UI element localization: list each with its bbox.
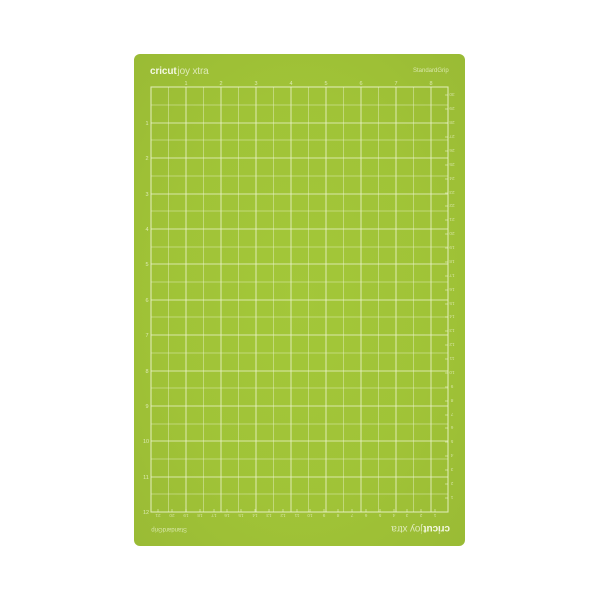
right centimetre ruler: 27 xyxy=(449,133,455,139)
right centimetre ruler: 10 xyxy=(449,369,455,375)
bottom centimetre ruler: 18 xyxy=(197,512,203,518)
top inch ruler: 6 xyxy=(359,81,363,87)
right centimetre ruler: 25 xyxy=(449,161,455,167)
right centimetre ruler: 26 xyxy=(449,147,455,153)
bottom centimetre ruler: 5 xyxy=(378,512,381,518)
right centimetre ruler: 9 xyxy=(450,383,453,389)
left inch ruler: 10 xyxy=(143,439,149,445)
logo: top xyxy=(150,66,209,77)
left inch ruler: 9 xyxy=(145,404,149,410)
left inch ruler: 5 xyxy=(145,262,149,268)
bottom centimetre ruler: 10 xyxy=(307,512,313,518)
right centimetre ruler: 16 xyxy=(449,286,455,292)
right centimetre ruler: 30 xyxy=(449,91,455,97)
bottom centimetre ruler: 2 xyxy=(419,512,422,518)
right centimetre ruler: 11 xyxy=(449,355,454,361)
right centimetre ruler: 2 xyxy=(450,480,453,486)
left inch ruler: 11 xyxy=(143,475,149,481)
right centimetre ruler: 19 xyxy=(449,244,455,250)
bottom centimetre ruler: 16 xyxy=(224,512,230,518)
bottom centimetre ruler: 14 xyxy=(252,512,258,518)
right centimetre ruler: 29 xyxy=(449,105,455,111)
right centimetre ruler: 3 xyxy=(450,466,453,472)
right centimetre ruler: 22 xyxy=(449,202,455,208)
panel: cutting mat xyxy=(134,54,465,546)
top inch ruler: 7 xyxy=(394,81,398,87)
right centimetre ruler: 15 xyxy=(449,300,455,306)
top inch ruler xyxy=(184,81,433,87)
right centimetre ruler: 20 xyxy=(449,230,455,236)
bottom centimetre ruler: 6 xyxy=(364,512,367,518)
left inch ruler: 2 xyxy=(145,156,149,162)
bottom centimetre ruler: 15 xyxy=(238,512,244,518)
bottom centimetre ruler: 20 xyxy=(169,512,175,518)
right centimetre ruler: 21 xyxy=(449,216,455,222)
left inch ruler: 7 xyxy=(145,333,149,339)
bottom centimetre ruler: 13 xyxy=(266,512,272,518)
top inch ruler: 8 xyxy=(429,81,433,87)
bottom centimetre ruler: 9 xyxy=(322,512,325,518)
right centimetre ruler: 4 xyxy=(450,452,453,458)
right centimetre ruler: 18 xyxy=(449,258,455,264)
left inch ruler: 1 xyxy=(145,121,149,127)
bottom centimetre ruler: 3 xyxy=(405,512,408,518)
top inch ruler: 4 xyxy=(289,81,293,87)
right centimetre ruler: 17 xyxy=(449,272,455,278)
right centimetre ruler xyxy=(445,91,455,500)
bottom centimetre ruler xyxy=(155,509,436,518)
bottom centimetre ruler: 1 xyxy=(433,512,436,518)
right centimetre ruler: 23 xyxy=(449,189,455,195)
label: StandardGrip bottom, upside down: StandardGrip xyxy=(151,526,187,532)
right centimetre ruler: 5 xyxy=(450,438,453,444)
logo: bottom, upside down xyxy=(391,523,450,534)
left inch ruler: 4 xyxy=(145,227,149,233)
bottom centimetre ruler: 12 xyxy=(280,512,286,518)
bottom centimetre ruler: 8 xyxy=(336,512,339,518)
bottom centimetre ruler: 7 xyxy=(350,512,353,518)
top inch ruler: 2 xyxy=(219,81,223,87)
left inch ruler: 3 xyxy=(145,192,149,198)
left inch ruler: 6 xyxy=(145,298,149,304)
logo: bottom, upside down: joy xtra xyxy=(391,523,424,534)
logo: top: joy xtra xyxy=(176,66,209,77)
bottom centimetre ruler: 4 xyxy=(392,512,395,518)
right centimetre ruler: 28 xyxy=(449,119,455,125)
left inch ruler xyxy=(143,121,149,516)
label: StandardGrip top: StandardGrip xyxy=(413,68,449,74)
left inch ruler: 12 xyxy=(143,510,149,516)
top inch ruler: 3 xyxy=(254,81,258,87)
right centimetre ruler: 1 xyxy=(450,494,453,500)
logo: top: cricut xyxy=(150,66,177,77)
top inch ruler: 5 xyxy=(324,81,328,87)
right centimetre ruler: 14 xyxy=(449,313,455,319)
right centimetre ruler: 6 xyxy=(450,424,453,430)
bottom centimetre ruler: 11 xyxy=(294,512,299,518)
right centimetre ruler: 24 xyxy=(449,175,455,181)
grid xyxy=(151,87,448,512)
left inch ruler: 8 xyxy=(145,369,149,375)
right centimetre ruler: 7 xyxy=(450,411,453,417)
right centimetre ruler: 12 xyxy=(449,341,455,347)
top inch ruler: 1 xyxy=(184,81,188,87)
logo: bottom, upside down: cricut xyxy=(423,523,450,534)
bottom centimetre ruler: 17 xyxy=(211,512,217,518)
bottom centimetre ruler: 21 xyxy=(155,512,161,518)
bottom centimetre ruler: 19 xyxy=(183,512,189,518)
right centimetre ruler: 13 xyxy=(449,327,455,333)
right centimetre ruler: 8 xyxy=(450,397,453,403)
